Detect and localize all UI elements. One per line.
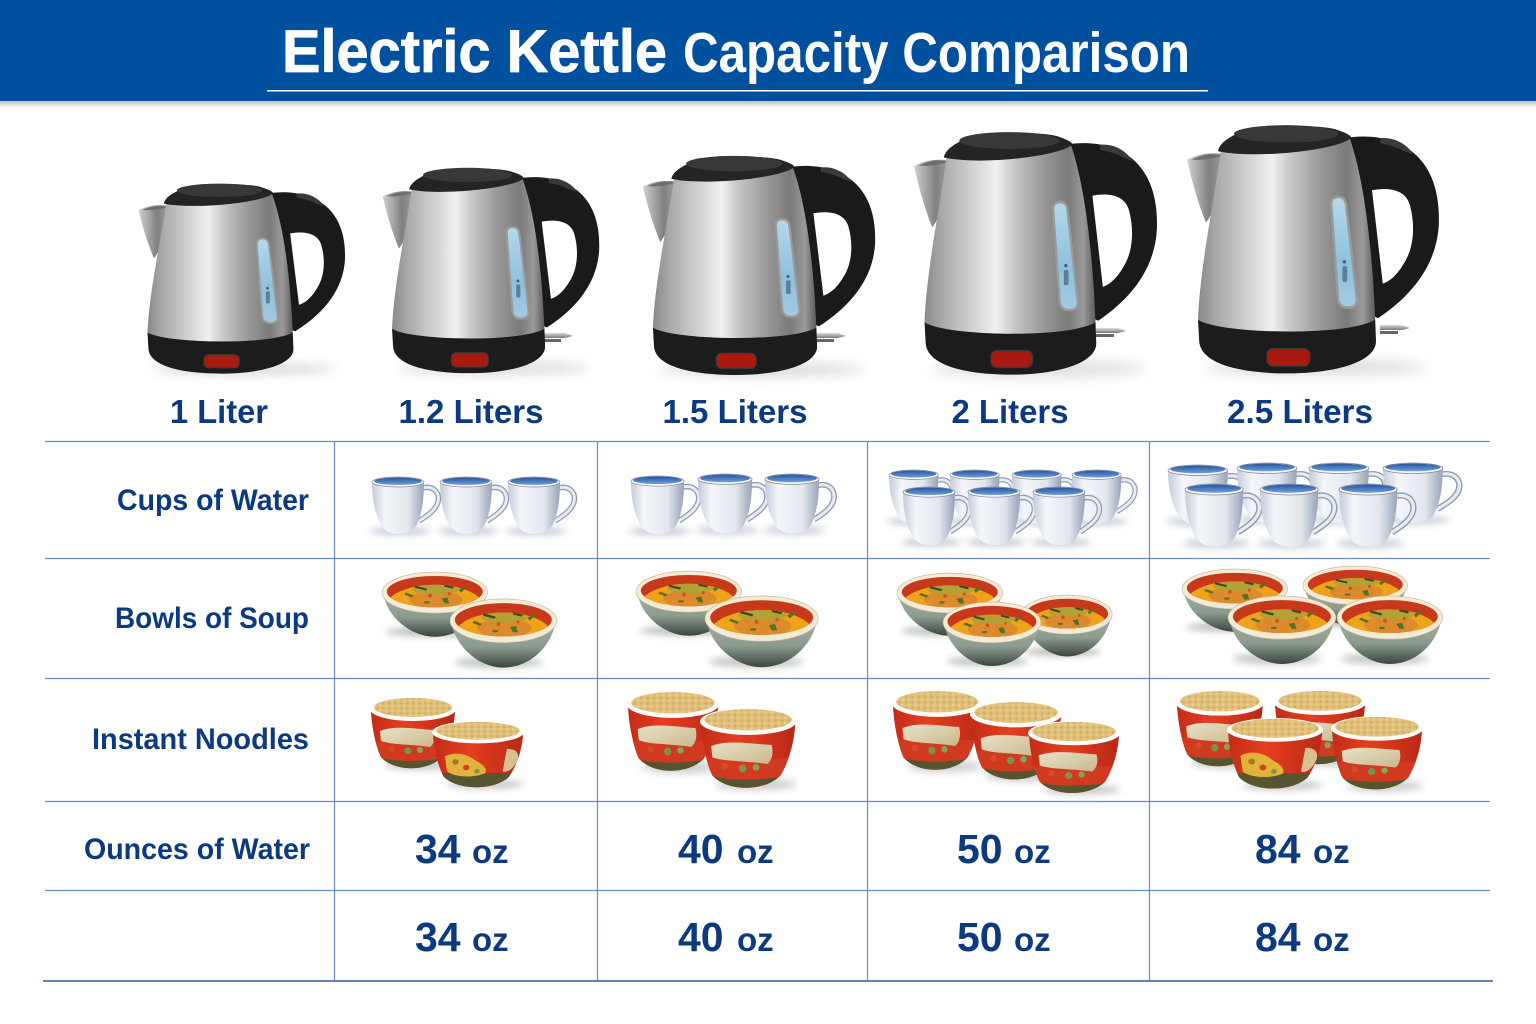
value: 84 oz: 84 bbox=[1255, 914, 1301, 960]
soup row bbox=[382, 566, 1443, 668]
row label: ounces of water: Ounces of Water bbox=[84, 833, 310, 866]
title: Capacity Comparison bbox=[683, 21, 1190, 85]
value: 40 oz: 40 bbox=[678, 826, 724, 872]
label: 2.5 liters: 2.5 Liters bbox=[1227, 393, 1373, 430]
noodles: 1 liter bbox=[370, 697, 524, 792]
value: 34 oz: oz bbox=[472, 921, 509, 958]
value: 34 oz: oz bbox=[472, 833, 509, 870]
bowls: 1 liter bbox=[382, 572, 557, 668]
cups: 1 liter bbox=[370, 477, 574, 535]
row labels bbox=[84, 484, 310, 866]
kettle: 2 liters bbox=[914, 132, 1157, 375]
kettle row bbox=[139, 125, 1439, 376]
capacity labels bbox=[170, 393, 1373, 430]
cups row bbox=[370, 463, 1459, 548]
value: 84 oz: 84 bbox=[1255, 826, 1301, 872]
label: 1.5 liters: 1.5 Liters bbox=[662, 393, 808, 430]
unlabeled bottom row bbox=[415, 914, 1350, 960]
value: 50 oz: 50 bbox=[957, 826, 1003, 872]
kettle: 1 liter bbox=[139, 184, 345, 374]
value: 84 oz: oz bbox=[1313, 921, 1350, 958]
cups: 1.2 liters bbox=[629, 474, 834, 535]
noodles: 1.5 liters bbox=[892, 690, 1120, 798]
kettle: 1.5 liters bbox=[643, 156, 875, 376]
kettle: 2.5 liters bbox=[1187, 125, 1439, 374]
value: 50 oz: oz bbox=[1014, 833, 1051, 870]
value: 40 oz: oz bbox=[737, 833, 774, 870]
value: 34 oz: 34 bbox=[415, 826, 461, 872]
value: 84 oz: oz bbox=[1313, 833, 1350, 870]
title banner bbox=[0, 0, 1536, 108]
cups: 2 liters bbox=[1166, 463, 1459, 548]
bowls: 1.2 liters bbox=[636, 571, 818, 667]
kettle: 1.2 liters bbox=[383, 168, 599, 374]
bowls: 2 liters bbox=[1182, 566, 1443, 664]
bowls: 1.5 liters bbox=[897, 573, 1112, 666]
noodles row bbox=[370, 690, 1423, 798]
label: 2 liters: 2 Liters bbox=[952, 393, 1068, 430]
table grid bbox=[43, 441, 1493, 981]
value: 34 oz: 34 bbox=[415, 914, 461, 960]
title: Electric Kettle bbox=[282, 18, 667, 85]
value: 40 oz: 40 bbox=[678, 914, 724, 960]
ounces row bbox=[415, 826, 1350, 872]
title bbox=[282, 18, 1190, 85]
row label: cups of water: Cups of Water bbox=[117, 484, 309, 517]
value: 50 oz: oz bbox=[1014, 921, 1051, 958]
label: 1.2 liters: 1.2 Liters bbox=[398, 393, 544, 430]
row label: bowls of soup: Bowls of Soup bbox=[115, 602, 309, 635]
label: 1 liter: 1 Liter bbox=[170, 393, 268, 430]
cups: 1.5 liters bbox=[887, 470, 1135, 546]
noodles: 2 liters bbox=[1176, 690, 1423, 794]
value: 50 oz: 50 bbox=[957, 914, 1003, 960]
value: 40 oz: oz bbox=[737, 921, 774, 958]
row label: instant noodles: Instant Noodles bbox=[92, 723, 309, 756]
noodles: 1.2 liters bbox=[627, 691, 796, 793]
